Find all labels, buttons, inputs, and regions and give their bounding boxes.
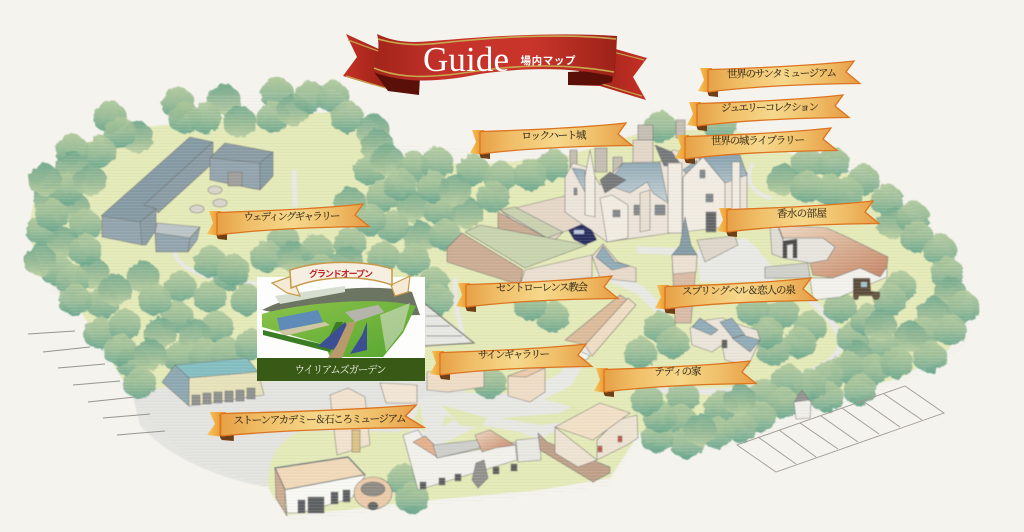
label: Perfume Room (717, 201, 879, 237)
building: wedding gallery (101, 137, 273, 252)
label: World's Castle Library: 世界の城ライブラリー (711, 134, 805, 147)
grand open panel: William's Garden (257, 262, 425, 381)
icon: vintage car (853, 278, 880, 300)
building: garden terrace stairs (565, 295, 636, 360)
castle towers and gables (585, 150, 740, 242)
land: green base (30, 112, 963, 515)
label: Spring Bell and Lovers Fountain: スプリングベル＆恋人の泉 (682, 283, 797, 298)
roads (174, 165, 840, 392)
castle walls (565, 150, 747, 242)
central plaza roads (405, 392, 600, 445)
texture: canvas lines (30, 90, 973, 520)
left tail (343, 34, 400, 90)
building: spring bell tower (672, 217, 738, 323)
grand open banner: グランドオープン (309, 268, 373, 279)
subtitle text: 場内マップ (520, 54, 576, 67)
label: Perfume Room: 香水の部屋 (777, 207, 828, 220)
label: Wedding Gallery: ウェディングギャラリー (243, 210, 341, 224)
building: lockhart castle (565, 120, 747, 242)
garden name bar: ウイリアムズガーデン (294, 364, 386, 376)
label: Stone Academy and Pebble Museum (207, 405, 424, 441)
castle roofs (572, 152, 747, 203)
paved plaza (133, 376, 470, 487)
map (24, 76, 980, 520)
building: long teal-roof hall (162, 358, 264, 406)
garden photo (257, 277, 425, 359)
small chapel (794, 390, 811, 419)
building: beige villa with flags (538, 403, 638, 482)
label: St. Lawrence Church (456, 276, 618, 312)
label: World's Castle Library (675, 128, 837, 164)
label: Sign Gallery (430, 344, 592, 380)
garden name bar (257, 358, 425, 381)
title ribbon (343, 34, 647, 100)
label: Jewelry Collection: ジュエリーコレクション (721, 101, 819, 115)
building: museum church (403, 430, 541, 490)
label: Stone Academy and Pebble Museum: ストーンアカデミー＆石ころミュージアム (233, 413, 407, 427)
label: Jewelry Collection (687, 95, 849, 131)
building: sign gallery (330, 367, 545, 455)
label: Lockhart Castle (470, 123, 632, 159)
building: teddy house (690, 318, 760, 366)
ribbon body (373, 34, 617, 80)
label: World's Santa Museum: 世界のサンタミュージアム (727, 66, 837, 81)
label: Teddy's House (594, 361, 756, 397)
forecourt pavement (697, 238, 775, 282)
label: St. Lawrence Church: セントローレンス教会 (496, 281, 589, 294)
building: stone academy (275, 457, 392, 516)
trees (24, 76, 980, 514)
label: Spring Bell and Lovers Fountain (655, 278, 817, 314)
building: perfume room rotunda (765, 225, 888, 300)
label: Lockhart Castle: ロックハート城 (521, 129, 587, 142)
label: Teddy's House: テディの家 (654, 365, 702, 378)
right parking grid (737, 386, 944, 472)
icon: navy car (568, 224, 597, 245)
left parking lines (28, 331, 165, 435)
right tail (568, 48, 647, 100)
title text: Guide (423, 40, 509, 79)
building: centre lawrence church (447, 196, 636, 285)
label: World's Santa Museum (698, 61, 860, 97)
building: striped lot (424, 303, 474, 346)
folds (374, 72, 420, 95)
lawn islands in plaza (412, 405, 590, 432)
label: Wedding Gallery (207, 204, 369, 240)
label: Sign Gallery: サインギャラリー (478, 349, 550, 361)
castle chimneys (570, 120, 685, 173)
grand open banner (272, 262, 410, 296)
